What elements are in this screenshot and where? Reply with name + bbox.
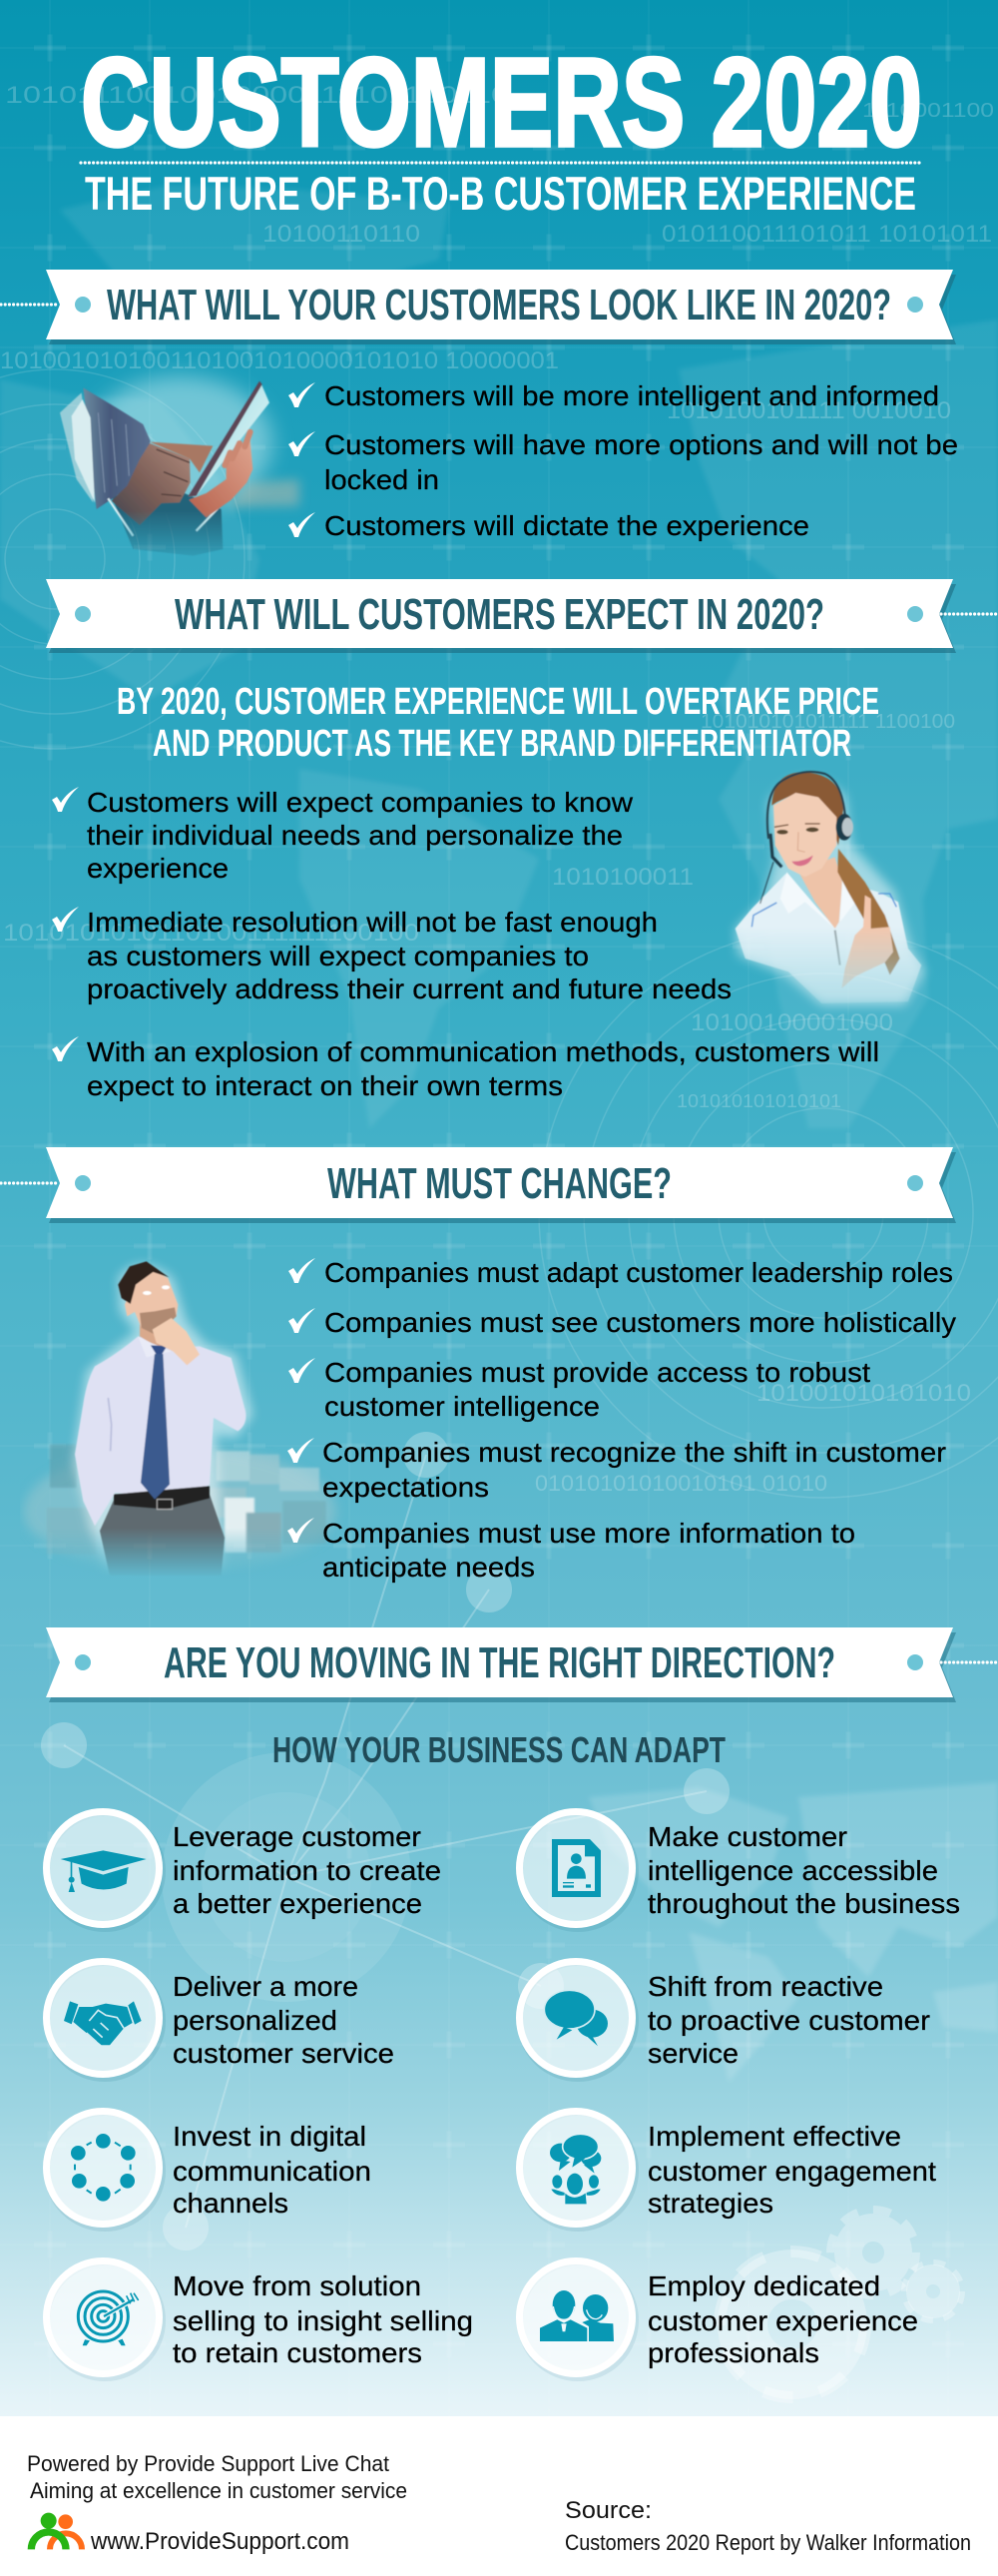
footer: powered by: Aiming at excellence in customer service [30, 2478, 407, 2503]
item: move to insight selling: Move from solution [173, 2270, 421, 2301]
footer: source: Source: [565, 2497, 652, 2524]
list: customer expectations [52, 787, 879, 1101]
item: invest in digital channels [46, 2111, 371, 2229]
list: what must change [287, 1257, 956, 1583]
list: customer expectations: Immediate resolution will not be fast enough [87, 907, 658, 938]
item: move to insight selling [46, 2260, 473, 2378]
item: employ experience professionals: Employ dedicated [648, 2270, 880, 2301]
item: implement engagement strategies: Implement effective [648, 2121, 901, 2152]
item: invest in digital channels: communication [173, 2156, 371, 2187]
list: what must change: Companies must adapt customer leadership roles [324, 1257, 953, 1288]
list: what must change: Companies must recognize the shift in customer [322, 1437, 946, 1468]
banner 4: are you moving in the right direction [46, 1627, 997, 1702]
item: deliver personalized service: customer service [173, 2038, 394, 2069]
binary code background text: 10100100001000 [691, 1009, 893, 1036]
footer: powered by [27, 2451, 407, 2555]
photo: woman with headset [736, 772, 925, 1005]
list: customer expectations: as customers will expect companies to [87, 941, 589, 971]
binary code background text: 010110011101011 10101011 [662, 221, 992, 248]
banner 3: what must change: WHAT MUST CHANGE? [327, 1159, 672, 1208]
binary code background text: 101010101010101 [677, 1091, 841, 1111]
item: move to insight selling: selling to insight selling [173, 2305, 473, 2336]
list: customers bullets: Customers will be more intelligent and informed [324, 380, 939, 411]
item: shift to proactive service: to proactive customer [648, 2005, 930, 2036]
binary code background text: 101010101011111 1100100 [701, 711, 955, 733]
item: leverage customer information: Leverage customer [173, 1821, 421, 1852]
item: invest in digital channels: channels [173, 2188, 288, 2219]
item: make customer intelligence accessible: throughout the business [648, 1888, 960, 1919]
binary code background text: 1010100011 [552, 864, 694, 891]
item: deliver personalized service: Deliver a more [173, 1971, 358, 2002]
item: leverage customer information: a better experience [173, 1888, 422, 1919]
item: make customer intelligence accessible [519, 1811, 960, 1929]
list: what must change: customer intelligence [324, 1391, 600, 1422]
list: customer expectations: expect to interact on their own terms [87, 1070, 563, 1101]
banner 3: what must change [1, 1147, 956, 1223]
item: employ experience professionals: customer experience [648, 2305, 918, 2336]
binary code background text [0, 82, 994, 1496]
list: customers bullets: Customers will dictate the experience [324, 510, 809, 541]
list: customer expectations: experience [87, 853, 229, 884]
binary code background text: 1010101010110100111111100100 [3, 920, 419, 947]
item: implement engagement strategies [519, 2111, 936, 2229]
list: customers bullets: locked in [324, 464, 439, 495]
list: what must change: expectations [322, 1472, 489, 1503]
list: customer expectations: their individual needs and personalize the [87, 820, 623, 851]
item: make customer intelligence accessible: intelligence accessible [648, 1855, 938, 1886]
item: leverage customer information: information to create [173, 1855, 441, 1886]
item: implement engagement strategies: customer engagement [648, 2156, 936, 2187]
item: make customer intelligence accessible: Make customer [648, 1821, 847, 1852]
item: leverage customer information [46, 1811, 441, 1929]
subheading: how your business can adapt: HOW YOUR BUSINESS CAN ADAPT [272, 1729, 726, 1770]
list: customers bullets [288, 380, 958, 541]
photo: hands holding a tablet [60, 376, 299, 556]
binary code background text: 101001010101010 [756, 1380, 971, 1407]
list: what must change: anticipate needs [322, 1552, 535, 1583]
binary code background text: 10100110110 [262, 221, 420, 248]
list: what must change: Companies must provide access to robust [324, 1357, 870, 1388]
footer: source [565, 2497, 971, 2555]
item: deliver personalized service [46, 1961, 394, 2079]
item: employ experience professionals [519, 2260, 918, 2378]
item: shift to proactive service: Shift from reactive [648, 1971, 883, 2002]
icon: Provide Support logo [31, 2513, 82, 2549]
binary code background text: 1110001100 [862, 100, 994, 122]
list: customer expectations: Customers will expect companies to know [87, 787, 634, 818]
item: move to insight selling: to retain customers [173, 2337, 422, 2368]
item: employ experience professionals: professionals [648, 2337, 819, 2368]
banner 2: what will customers expect [46, 579, 997, 653]
footer: powered by: Powered by Provide Support Live Chat [27, 2451, 389, 2476]
binary code background text: 10101110010010000111101100110 [5, 82, 509, 109]
item: shift to proactive service: service [648, 2038, 739, 2069]
list: what must change: Companies must see customers more holistically [324, 1307, 956, 1338]
key statement [117, 681, 879, 765]
item: deliver personalized service: personalized [173, 2005, 337, 2036]
list: customers bullets: Customers will have more options and will not be [324, 429, 958, 460]
footer panel [0, 2416, 998, 2576]
binary code background text: 1010100101111 0010010 [667, 397, 951, 424]
binary code background text: 1010010101001101001010000101010 10000001 [0, 347, 559, 374]
item: shift to proactive service [519, 1961, 930, 2079]
list: customer expectations: With an explosion of communication methods, customers will [87, 1036, 879, 1067]
item: implement engagement strategies: strategies [648, 2188, 773, 2219]
footer: powered by: www.ProvideSupport.com [90, 2528, 349, 2555]
item: invest in digital channels: Invest in digital [173, 2121, 366, 2152]
photo: thinking businessman over city [23, 1261, 336, 1576]
list: customer expectations: proactively address their current and future needs [87, 973, 732, 1004]
list: what must change: Companies must use more information to [322, 1518, 855, 1549]
binary code background text: 01010101010010101 01010 [535, 1471, 827, 1496]
banner 1: what will your customers look like [1, 270, 956, 344]
